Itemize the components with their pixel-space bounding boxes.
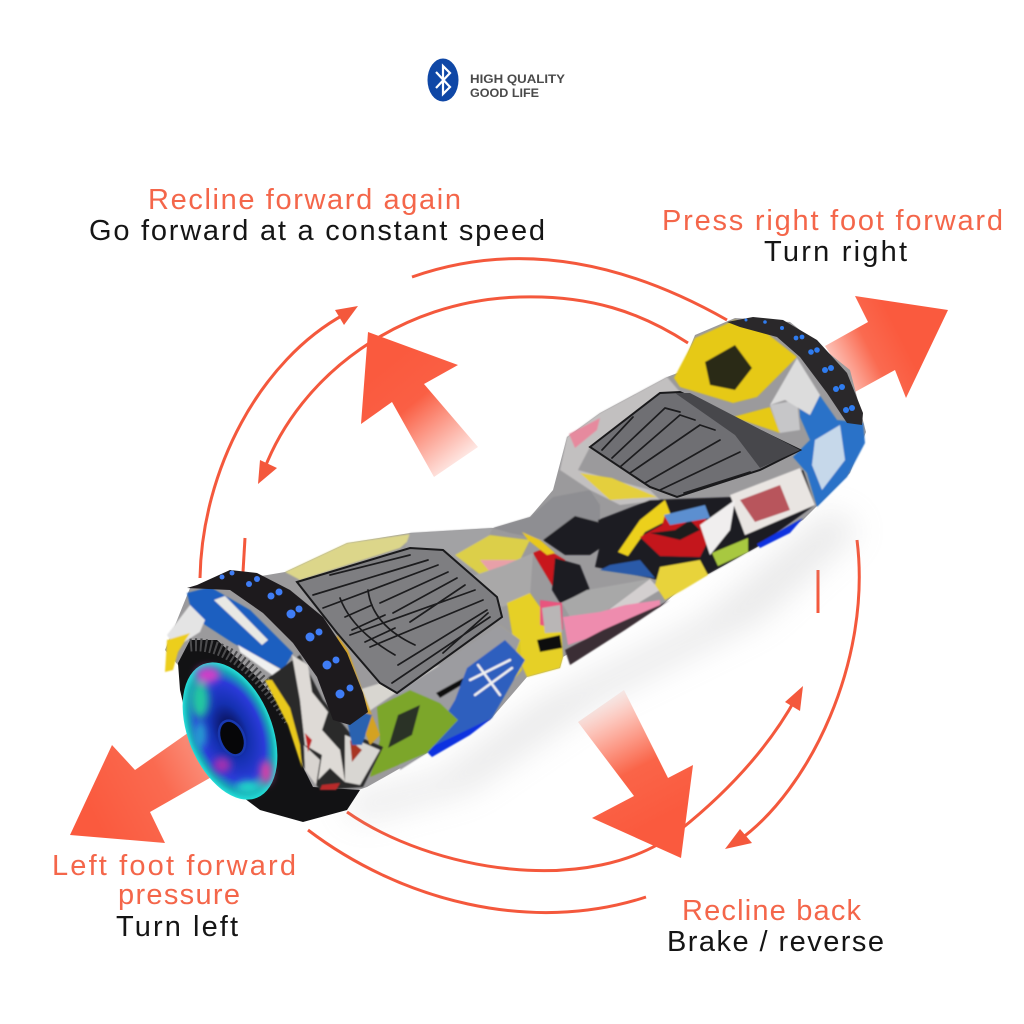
far fender LED band: [727, 317, 863, 425]
label: turn left: Turn left: [116, 911, 238, 943]
near fender art: [165, 587, 383, 790]
label: brake or reverse: [667, 895, 884, 958]
label: turn left: pressure: [118, 879, 240, 911]
brand logo: HIGH QUALITY: [470, 74, 565, 86]
circular arrows: backward: [308, 540, 859, 913]
label: recline forward: Recline forward again: [148, 184, 461, 216]
board body: [165, 318, 866, 800]
near wheel: [164, 640, 360, 822]
label: brake or reverse: Brake / reverse: [667, 926, 884, 958]
graffiti panels: [285, 320, 865, 777]
near fender LED band: [187, 570, 368, 725]
label: recline forward: Go forward at a constant speed: [89, 215, 545, 247]
label: turn left: [52, 850, 296, 943]
circular arrows: forward: [200, 259, 727, 578]
label: turn left: Left foot forward: [52, 850, 296, 882]
direction arrow: turn right: [825, 296, 948, 398]
brand logo: GOOD LIFE: [470, 88, 539, 100]
brand logo: [428, 58, 565, 102]
centre yellow and pink: [507, 593, 563, 677]
far fender art: [674, 320, 797, 403]
hoverboard: [164, 317, 866, 822]
label: brake or reverse: Recline back: [682, 895, 862, 927]
far footpad: [590, 392, 800, 497]
label: turn right: Press right foot forward: [662, 205, 1003, 237]
handle gap: [562, 579, 650, 617]
near footpad: [297, 548, 502, 693]
label: turn right: [662, 205, 1003, 268]
direction arrow: forward: [361, 332, 478, 477]
near side graffiti: [395, 625, 520, 770]
far side graffiti: [595, 470, 815, 587]
label: turn right: Turn right: [764, 236, 907, 268]
ground shadow: [340, 510, 860, 820]
near deck top: [285, 533, 417, 580]
far deck top: [560, 377, 680, 505]
direction arrow: turn left: [70, 728, 215, 843]
direction arrow: reverse: [578, 690, 693, 858]
label: recline forward: [89, 184, 545, 247]
